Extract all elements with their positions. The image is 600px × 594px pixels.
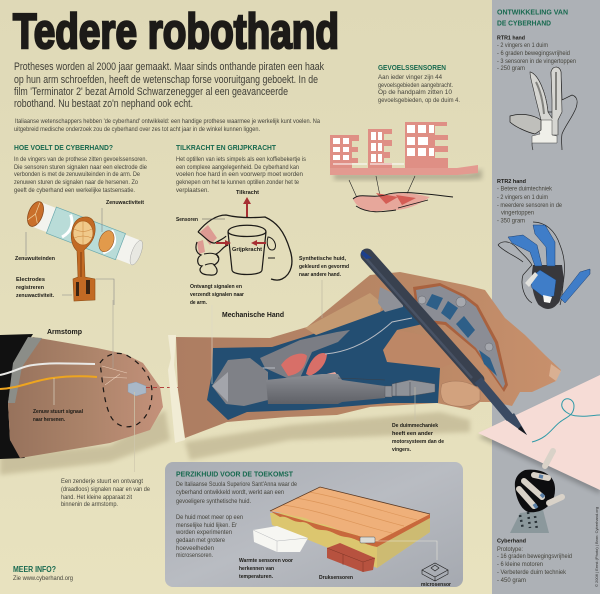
heading: ontwikkeling — [497, 8, 568, 28]
meer info: MEER INFO? — [13, 565, 56, 574]
intro text: op hun arm schroefden, heeft de wetenschap forse vooruitgang geboekt. In de — [14, 74, 318, 86]
illustration: rtr2 hand — [498, 222, 590, 309]
callout: synthetische huid: naar andere hand. — [299, 272, 341, 278]
nerve white — [0, 363, 95, 375]
text block: tilkracht: een complexe aangelegenheid. De cyberhand kan — [176, 164, 299, 171]
wires — [248, 318, 412, 368]
text: rtr2 hand: - 2 vingers en 1 duim — [497, 194, 548, 201]
heading: hoe voelt de cyberhand: HOE VOELT DE CYBERHAND? — [14, 143, 113, 152]
illustration: hand with sensor zones — [349, 176, 453, 212]
meer info — [13, 565, 74, 582]
illustration: nerve tube with electrode — [24, 198, 146, 301]
skin flap — [305, 293, 382, 335]
label: warmte sensoren: herkennen van — [239, 566, 275, 572]
arrow: tilkracht — [243, 197, 251, 218]
cuff — [168, 335, 185, 443]
text block: gevoelssensoren: gevoelsgebieden aangebracht. — [378, 82, 453, 89]
label: warmte sensoren: Warmte sensoren voor — [239, 558, 294, 564]
microsensor on skin — [360, 537, 375, 543]
label: grijpkracht: Grijpkracht — [232, 247, 262, 253]
text block: hoe voelt: verbonden is met de zenuwuiteinden in de arm. De — [14, 171, 140, 178]
upper lever — [260, 330, 350, 382]
text block: gevoelssensoren: Op de handpalm zitten 10 — [378, 89, 453, 96]
text: rtr2 hand — [497, 179, 562, 224]
callout lines: tube — [26, 208, 114, 305]
text: rtr1 hand: RTR1 hand — [497, 36, 526, 42]
label: electrodes: Electrodes — [16, 277, 45, 283]
text block: tilkracht: Het optillen van iets simpels als een koffiebekertje is — [176, 156, 306, 163]
gray knuckle — [378, 287, 403, 312]
mechanical hand — [168, 272, 561, 460]
sender cube — [128, 382, 146, 396]
red muscles — [281, 354, 307, 376]
finger gap highlight — [383, 330, 456, 368]
heading: perzikhuid: PERZIKHUID VOOR DE TOEKOMST — [176, 470, 293, 478]
text: perzikhuid detail: hoeveelheden — [176, 545, 215, 552]
illustration: skin block — [253, 487, 437, 572]
callout: zenderje — [61, 300, 150, 508]
label: sensoren — [176, 217, 225, 223]
text block: tilkracht — [176, 156, 306, 194]
diagram: sensor layout — [330, 122, 482, 180]
armstomp illustration — [0, 334, 170, 475]
callout: synthetische huid — [299, 256, 350, 318]
red pressure sensors — [327, 543, 375, 572]
hand shadow — [185, 412, 470, 460]
label: druksensoren: Druksensoren — [319, 575, 354, 581]
text: cyberhand: - 16 graden bewegingsvrijheid — [497, 553, 572, 560]
text block: gevoelssensoren — [378, 74, 460, 104]
intro small print — [14, 118, 321, 133]
callout: duimmechaniek — [392, 387, 444, 453]
panel: perzikhuid — [165, 462, 463, 588]
text block: hoe voelt: In de vingers van de prothese zitten gevoelssensoren. — [14, 156, 147, 163]
text block: gevoelssensoren: gevoelsgebieden, op de duim 4. — [378, 97, 460, 104]
illustration: rtr1 hand — [510, 67, 577, 150]
text: cyberhand: - Verbeterde duim techniek — [497, 569, 567, 576]
thumb tip — [441, 381, 480, 406]
icon: microsensor — [422, 563, 448, 581]
callout: ontvangt signalen — [190, 284, 245, 384]
stump skin — [8, 337, 163, 458]
callout: zenderje: (draadloos) signalen naar en van de — [61, 486, 150, 493]
text block: hoe voelt: Die sensoren sturen signalen naar een electrode die — [14, 164, 148, 171]
nerve orange — [0, 376, 97, 389]
arm shadow — [0, 410, 170, 475]
meer info: Zie www.cyberhand.org — [13, 575, 74, 582]
label: warmte sensoren — [239, 558, 294, 580]
text: rtr2 hand: - 350 gram — [497, 218, 525, 224]
callout: ontvangt signalen: verzendt signalen naar — [190, 292, 245, 298]
signal line — [146, 386, 215, 388]
label: electrodes: zenuwactiviteit. — [16, 293, 54, 299]
callout: synthetische huid: gekleurd en gevormd — [299, 264, 350, 270]
callout: duimmechaniek: vingers. — [392, 447, 411, 453]
text: rtr2 hand: vingertoppen — [501, 210, 535, 216]
label: armstomp: Armstomp — [47, 327, 82, 336]
callout: ontvangt signalen: de arm. — [190, 300, 207, 306]
text block: hoe voelt — [14, 156, 148, 194]
text: rtr1 hand: - 250 gram — [497, 65, 525, 72]
knit edge — [8, 337, 42, 403]
title: Tedere robothand — [13, 5, 339, 59]
label: mechanische hand: Mechanische Hand — [222, 310, 284, 319]
text: perzikhuid intro: De Italiaanse Scuola Superiore Sant'Anna waar de — [176, 481, 297, 488]
text block: hoe voelt: zenuwen sturen de signalen naar de hersenen. Zo — [14, 179, 138, 186]
text: cyberhand: Prototype: — [497, 546, 523, 553]
pen — [361, 250, 527, 435]
text: perzikhuid intro: cyberhand ontwikkeld wordt, werkt aan een — [176, 489, 284, 496]
callout: duimmechaniek: De duimmechaniek — [392, 423, 439, 429]
pink triangle with teal line — [478, 375, 600, 494]
intro small print: uitgebreid medische onderzoek zou de cyberhand over zes tot acht jaar in de winkel kunnen liggen. — [14, 126, 260, 133]
illustration: cyberhand prototype — [510, 451, 562, 533]
text: perzikhuid detail: gedaan met grotere — [176, 537, 225, 544]
callout: zenuw: Zenuw stuurt signaal — [33, 409, 83, 415]
dashed zone — [100, 353, 152, 427]
blue interior — [207, 300, 440, 420]
text: perzikhuid intro — [176, 481, 297, 505]
label: sensoren: Sensoren — [176, 217, 198, 223]
text: rtr1 hand: - 6 graden bewegingsvrijheid — [497, 50, 571, 57]
white heat sensors — [253, 526, 308, 552]
credit line: © 2006 | Eerst (Photo) | Bron: Cyberhand.org — [595, 507, 599, 587]
text block: tilkracht: verplaatsen. — [176, 187, 209, 194]
skin — [176, 272, 561, 438]
finger mechanism — [413, 283, 508, 392]
intro text: film 'Terminator 2' bezat Arnold Schwarzenegger al een geavanceerde — [14, 86, 288, 98]
motor hub — [212, 358, 268, 406]
text: cyberhand: - 450 gram — [497, 577, 526, 584]
illustration: hand holding cup — [196, 215, 292, 280]
heading: ontwikkeling: DE CYBERHAND — [497, 18, 552, 28]
intro text — [14, 61, 324, 110]
callout: zenderje: hand. Het kleine apparaat zit — [61, 494, 132, 501]
text: perzikhuid detail: worden experimenten — [175, 529, 233, 536]
text: perzikhuid intro: gevoeligere synthetische huid. — [176, 498, 251, 505]
arrows: grijpkracht — [216, 240, 266, 246]
callout: duimmechaniek: motorsysteem dan de — [392, 439, 444, 445]
callout: zenderje: binnenin de armstomp. — [61, 501, 118, 508]
text: rtr2 hand: - meerdere sensoren in de — [497, 202, 562, 209]
text: perzikhuid detail: De huid moet meer op een — [176, 514, 244, 521]
text: perzikhuid detail — [175, 514, 244, 559]
label: zenuwactiviteit: Zenuwactiviteit — [106, 200, 144, 206]
text: rtr1 hand — [497, 36, 577, 72]
intro small print: Italiaanse wetenschappers hebben 'de cyberhand' ontwikkeld: een handige prothese waarmee je werkelijk kunt voelen. Na — [15, 118, 321, 125]
label: electrodes — [16, 277, 54, 299]
callout: zenderje: Een zenderje stuurt en ontvangt — [61, 478, 143, 485]
text: cyberhand — [497, 538, 572, 584]
text: rtr2 hand: - Betere duimtechniek — [497, 186, 553, 192]
thumb mechanism — [385, 380, 435, 397]
label: tilkracht: Tilkracht — [236, 190, 259, 196]
label: electrodes: registreren — [16, 285, 45, 291]
label: microsensor: microsensor — [421, 582, 452, 588]
text: rtr2 hand: RTR2 hand — [497, 179, 527, 185]
text block: hoe voelt: geeft de cyberhand een werkelijke tastsensatie. — [14, 187, 135, 194]
callout: synthetische huid: Synthetische huid, — [299, 256, 346, 262]
gevoelssensoren heading: GEVOELSSENSOREN — [378, 63, 446, 72]
main cylinder — [266, 374, 385, 404]
label: warmte sensoren: temperaturen. — [239, 574, 273, 580]
text block: gevoelssensoren: Aan ieder vinger zijn 44 — [378, 74, 443, 81]
intro text: robothand. Nu bestaat zo'n nephand ook echt. — [14, 98, 193, 110]
callout: duimmechaniek: heeft een ander — [392, 431, 434, 437]
text block: tilkracht: voelen hoe hard in een voorwerp moet worden — [176, 171, 304, 178]
callout: ontvangt signalen: Ontvangt signalen en — [190, 284, 243, 290]
label: zenuwuiteinden: Zenuwuiteinden — [15, 256, 56, 262]
callout: zenuw — [33, 378, 83, 423]
heading: tilkracht en grijpkracht: TILKRACHT EN GRIJPKRACHT — [176, 143, 276, 152]
heading: ontwikkeling: ONTWIKKELING VAN — [497, 8, 568, 16]
finger nail — [549, 364, 561, 381]
text: perzikhuid detail: microsensoren. — [176, 552, 213, 559]
intro text: Protheses worden al 2000 jaar gemaakt. Maar sinds onthande piraten een haak — [14, 61, 324, 73]
text: perzikhuid detail: menselijke huid lijken. Er — [176, 522, 237, 529]
panel: right column background — [492, 0, 600, 594]
text: rtr1 hand: - 2 vingers en 1 duim — [497, 42, 548, 49]
text: cyberhand: Cyberhand — [497, 538, 527, 544]
text block: tilkracht: geknepen om het te kunnen optillen zonder het te — [176, 179, 299, 186]
callout: zenuw: naar hersenen. — [33, 417, 65, 423]
text: rtr1 hand: - 3 sensoren in de vingertoppen — [497, 58, 577, 65]
text: cyberhand: - 6 kleine motoren — [497, 561, 544, 568]
sleeve — [0, 334, 33, 459]
